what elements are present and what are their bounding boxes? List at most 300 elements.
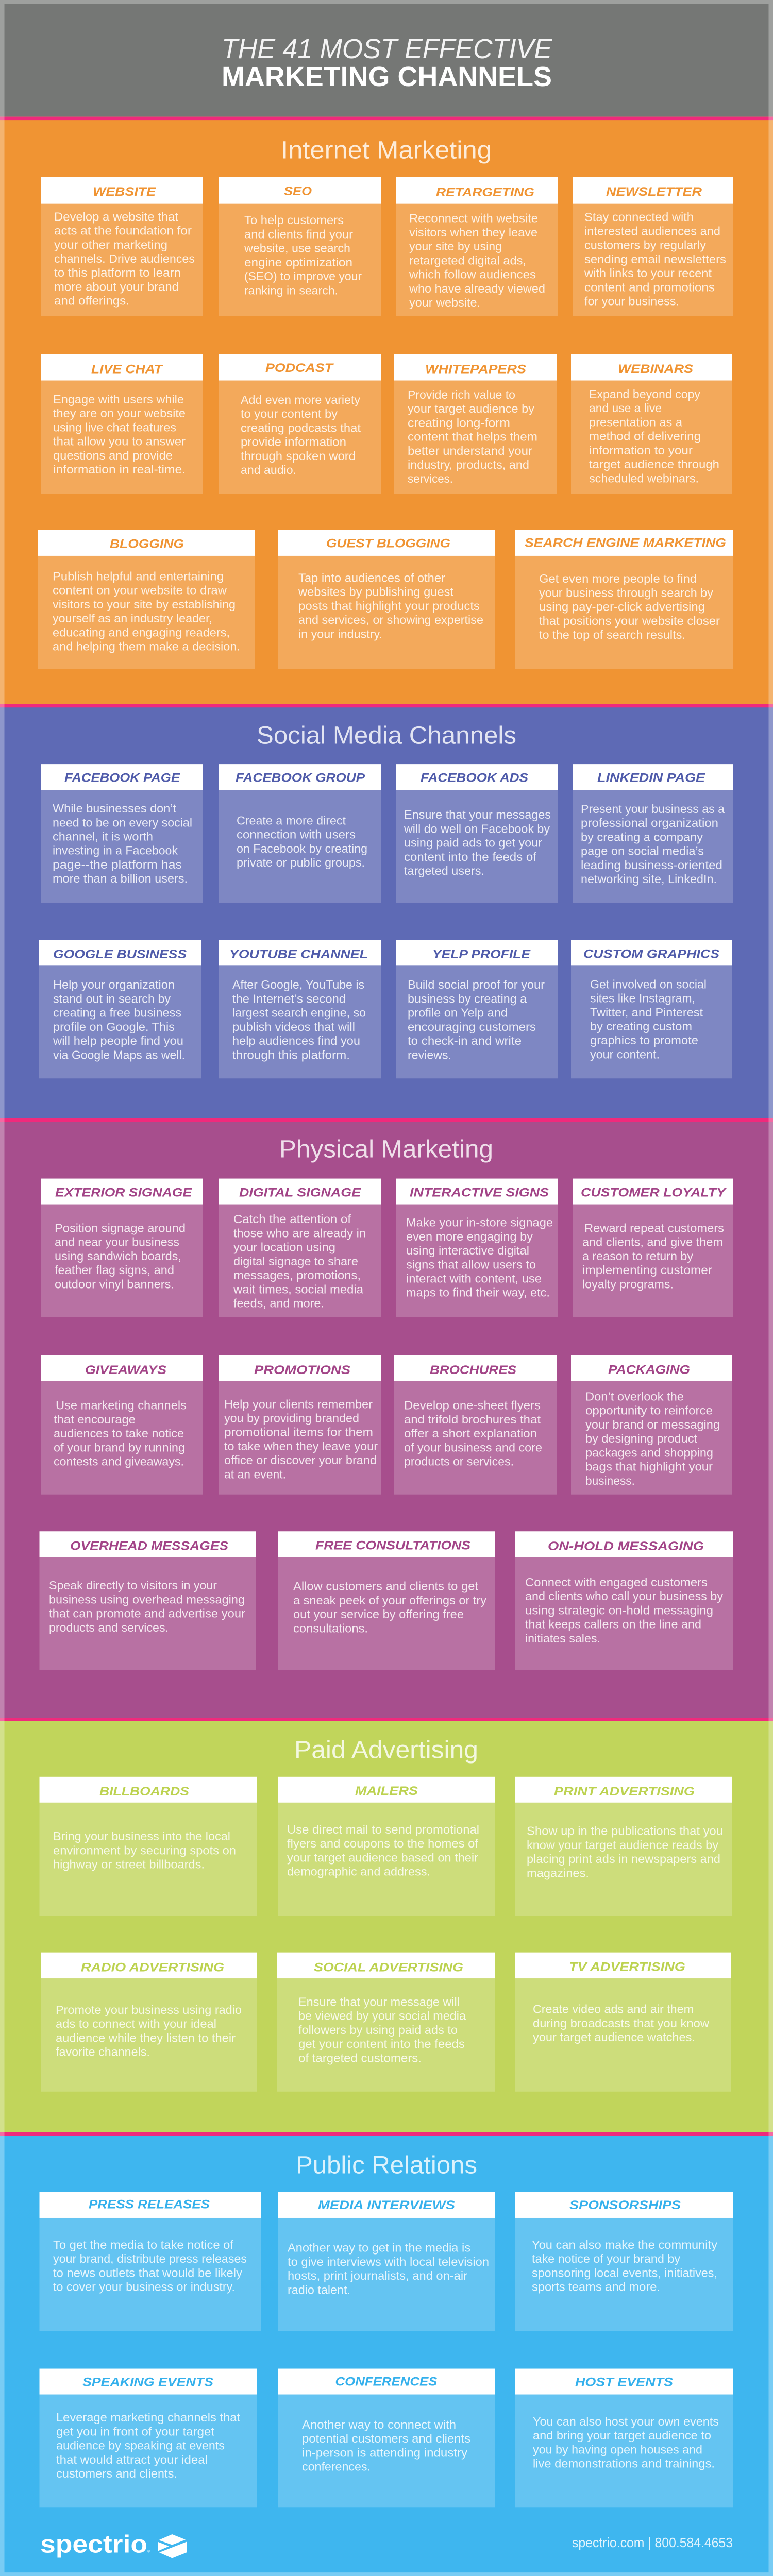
card: webinars: WEBINARS bbox=[618, 362, 694, 376]
card: podcast: to your content by bbox=[241, 408, 338, 421]
card: packaging: by designing product bbox=[585, 1433, 697, 1446]
card: newsletter: content and promotions bbox=[584, 281, 715, 294]
card: website: your other marketing bbox=[54, 239, 167, 251]
card: youtube channel: publish videos that will bbox=[232, 1021, 355, 1033]
card: guest blogging: websites by publishing guest bbox=[298, 586, 453, 599]
card: seo: website, use search bbox=[244, 242, 350, 255]
card: mailers: MAILERS bbox=[355, 1784, 418, 1798]
card: radio advertising: audience while they listen to their bbox=[56, 2032, 236, 2045]
card: blogging: content on your website to draw bbox=[53, 584, 227, 597]
card: customer loyalty: a reason to return by bbox=[582, 1250, 694, 1263]
card: speaking events: that would attract your ideal bbox=[56, 2453, 208, 2466]
card: search engine marketing: using pay-per-click advertising bbox=[539, 601, 705, 614]
card: speaking events: customers and clients. bbox=[56, 2468, 177, 2481]
card: conferences: conferences. bbox=[302, 2461, 371, 2473]
card: facebook page: FACEBOOK PAGE bbox=[64, 770, 181, 785]
card: podcast: creating podcasts that bbox=[241, 422, 361, 435]
card: promotions: Help your clients remember bbox=[224, 1398, 373, 1411]
card: print advertising: know your target audience reads by bbox=[527, 1839, 719, 1852]
heading: physical marketing: Physical Marketing bbox=[279, 1136, 493, 1163]
card: facebook ads: content into the feeds of bbox=[404, 851, 536, 863]
card: newsletter: interested audiences and bbox=[584, 225, 720, 238]
title bbox=[222, 34, 552, 92]
card: live chat: Engage with users while bbox=[53, 394, 184, 406]
heading: social media channels: Social Media Channels bbox=[257, 722, 516, 750]
card: exterior signage: using sandwich boards, bbox=[55, 1250, 181, 1263]
card: linkedin page bbox=[573, 764, 733, 903]
card: whitepapers bbox=[394, 354, 557, 494]
card: search engine marketing: that positions your website closer bbox=[539, 615, 720, 628]
heading: public relations: Public Relations bbox=[296, 2151, 477, 2179]
card: conferences: Another way to connect with bbox=[302, 2419, 456, 2431]
card: website: to this platform to learn bbox=[54, 267, 181, 280]
card: speaking events: audience by speaking at events bbox=[56, 2439, 225, 2452]
card: interactive signs: signs that allow users to bbox=[406, 1259, 536, 1272]
card: newsletter: customers by regularly bbox=[584, 239, 707, 252]
card: interactive signs: using interactive digital bbox=[406, 1245, 529, 1258]
card: media interviews: to give interviews with local television bbox=[288, 2256, 489, 2268]
card: customer loyalty bbox=[573, 1179, 733, 1317]
card: blogging: educating and engaging readers, bbox=[53, 626, 230, 639]
card: on-hold messaging: using strategic on-hold messaging bbox=[525, 1604, 713, 1617]
card: guest blogging bbox=[278, 530, 495, 669]
card: website: and offerings. bbox=[54, 295, 129, 308]
card: custom graphics: Get involved on social bbox=[590, 978, 707, 991]
card: google business: profile on Google. This bbox=[53, 1021, 175, 1033]
card: promotions: to take when they leave your bbox=[224, 1440, 378, 1453]
card: search engine marketing bbox=[515, 530, 733, 669]
card: podcast: PODCAST bbox=[265, 361, 334, 375]
card: mailers bbox=[278, 1777, 495, 1916]
card: host events: you by having open houses and bbox=[533, 2444, 702, 2456]
card: seo: (SEO) to improve your bbox=[244, 270, 362, 283]
card: yelp profile: encouraging customers bbox=[408, 1021, 536, 1033]
card: google business: creating a free business bbox=[53, 1007, 181, 1020]
card: billboards: highway or street billboards. bbox=[53, 1858, 205, 1871]
card: digital signage: feeds, and more. bbox=[233, 1297, 324, 1310]
card: retargeting: which follow audiences bbox=[409, 268, 536, 281]
card: exterior signage: and near your business bbox=[55, 1236, 179, 1249]
card: exterior signage: outdoor vinyl banners. bbox=[55, 1278, 174, 1291]
card: retargeting: your site by using bbox=[409, 241, 502, 253]
card: customer loyalty: implementing customer bbox=[582, 1264, 712, 1277]
card: overhead messages: business using overhead messaging bbox=[49, 1594, 245, 1606]
card: media interviews: MEDIA INTERVIEWS bbox=[318, 2198, 456, 2212]
card: yelp profile: business by creating a bbox=[408, 993, 527, 1006]
card: search engine marketing: your business through search by bbox=[539, 587, 714, 600]
icon: spectrio hexagon bbox=[158, 2534, 187, 2558]
card: interactive signs: interact with content, use bbox=[406, 1273, 542, 1285]
card: billboards: Bring your business into the local bbox=[53, 1831, 230, 1843]
card: google business bbox=[39, 940, 201, 1078]
card: tv advertising: your target audience watches. bbox=[533, 2031, 695, 2044]
card: retargeting: RETARGETING bbox=[436, 185, 534, 199]
card: giveaways: GIVEAWAYS bbox=[85, 1363, 167, 1377]
card: radio advertising: Promote your business using radio bbox=[56, 2004, 242, 2017]
card: customer loyalty: loyalty programs. bbox=[582, 1278, 674, 1291]
card: facebook group: Create a more direct bbox=[237, 815, 346, 827]
card: social advertising: be viewed by your social media bbox=[298, 2010, 466, 2023]
card: youtube channel: YOUTUBE CHANNEL bbox=[229, 947, 368, 961]
card: overhead messages: that can promote and advertise your bbox=[49, 1607, 245, 1620]
card: linkedin page: by creating a company bbox=[581, 831, 703, 844]
card: retargeting: visitors when they leave bbox=[409, 227, 537, 240]
card: linkedin page: leading business-oriented bbox=[581, 859, 722, 872]
card: facebook ads: FACEBOOK ADS bbox=[421, 770, 529, 785]
card: live chat bbox=[41, 354, 203, 494]
card: brochures: of your business and core bbox=[404, 1442, 542, 1454]
heading: internet marketing: Internet Marketing bbox=[281, 137, 492, 164]
card: interactive signs: Make your in-store signage bbox=[406, 1216, 553, 1229]
card: custom graphics: CUSTOM GRAPHICS bbox=[583, 947, 720, 961]
card: mailers: Use direct mail to send promotional bbox=[287, 1823, 479, 1836]
title: THE 41 MOST EFFECTIVE bbox=[222, 34, 552, 64]
card: sponsorships: You can also make the community bbox=[532, 2239, 718, 2251]
card: linkedin page: Present your business as a bbox=[581, 803, 725, 816]
card: custom graphics: sites like Instagram, bbox=[590, 992, 695, 1005]
card: digital signage: Catch the attention of bbox=[233, 1213, 351, 1226]
card: yelp profile: reviews. bbox=[408, 1049, 451, 1062]
card: overhead messages: Speak directly to visitors in your bbox=[49, 1580, 217, 1592]
card: print advertising: magazines. bbox=[527, 1867, 589, 1880]
card: host events: live demonstrations and trainings. bbox=[533, 2458, 715, 2470]
card: webinars bbox=[571, 354, 732, 494]
card: packaging: opportunity to reinforce bbox=[585, 1404, 713, 1417]
card: tv advertising bbox=[515, 1953, 731, 2092]
card: live chat: questions and provide bbox=[53, 450, 173, 462]
card: podcast: through spoken word bbox=[241, 450, 356, 463]
card: promotions: you by providing branded bbox=[224, 1412, 359, 1425]
card: live chat: using live chat features bbox=[53, 421, 176, 434]
card: webinars: and use a live bbox=[589, 402, 662, 415]
card: facebook ads bbox=[396, 764, 558, 903]
card: youtube channel bbox=[219, 940, 381, 1078]
card: facebook page: more than a billion users. bbox=[53, 873, 188, 886]
card: whitepapers: creating long-form bbox=[408, 417, 510, 430]
card: facebook page: investing in a Facebook bbox=[53, 844, 178, 857]
card: interactive signs: INTERACTIVE SIGNS bbox=[410, 1185, 549, 1199]
panel: paid advertising bbox=[0, 1718, 773, 2132]
card: website: channels. Drive audiences bbox=[54, 253, 195, 266]
card: packaging: bags that highlight your bbox=[585, 1461, 713, 1473]
card: youtube channel: through this platform. bbox=[232, 1049, 350, 1062]
card: sponsorships: sponsoring local events, initiatives, bbox=[532, 2267, 717, 2280]
card: blogging bbox=[38, 530, 255, 669]
card: free consultations: FREE CONSULTATIONS bbox=[315, 1538, 471, 1552]
card: facebook page: page--the platform has bbox=[53, 859, 182, 872]
card: digital signage: wait times, social media bbox=[233, 1283, 363, 1296]
card: live chat: that allow you to answer bbox=[53, 435, 186, 448]
card: free consultations bbox=[278, 1531, 495, 1670]
logo: spectrio wordmark: spectrio bbox=[40, 2531, 147, 2558]
card: blogging: BLOGGING bbox=[110, 536, 184, 551]
card: social advertising: SOCIAL ADVERTISING bbox=[314, 1960, 463, 1974]
card: conferences: CONFERENCES bbox=[335, 2374, 438, 2388]
card: exterior signage: feather flag signs, and bbox=[55, 1264, 174, 1277]
card: exterior signage: Position signage around bbox=[55, 1222, 186, 1235]
card: promotions bbox=[219, 1355, 381, 1495]
card: interactive signs bbox=[396, 1179, 558, 1317]
card: guest blogging: Tap into audiences of other bbox=[298, 572, 445, 585]
panel: public relations bbox=[0, 2132, 773, 2576]
card: giveaways bbox=[41, 1355, 203, 1495]
card: retargeting: your website. bbox=[409, 297, 480, 310]
card: mailers: your target audience based on their bbox=[287, 1852, 478, 1865]
card: live chat: they are on your website bbox=[53, 408, 186, 420]
card: customer loyalty: Reward repeat customers bbox=[584, 1222, 724, 1235]
card: brochures: offer a short explanation bbox=[404, 1428, 537, 1440]
card: interactive signs: even more engaging by bbox=[406, 1230, 533, 1243]
card: custom graphics: graphics to promote bbox=[590, 1035, 698, 1047]
card: whitepapers: better understand your bbox=[408, 445, 532, 457]
card: press releases: to news outlets that would be likely bbox=[53, 2267, 243, 2280]
card: seo: ranking in search. bbox=[244, 284, 338, 297]
card: facebook group: private or public groups. bbox=[237, 857, 365, 870]
card: packaging: Don’t overlook the bbox=[585, 1391, 684, 1403]
card: press releases: PRESS RELEASES bbox=[89, 2197, 210, 2211]
card: custom graphics: Twitter, and Pinterest bbox=[590, 1006, 703, 1019]
card: whitepapers: industry, products, and bbox=[408, 459, 529, 472]
card: packaging bbox=[571, 1355, 732, 1495]
card: sponsorships: sports teams and more. bbox=[532, 2281, 660, 2294]
card: retargeting bbox=[396, 177, 558, 316]
card: billboards bbox=[39, 1777, 257, 1916]
card: youtube channel: largest search engine, so bbox=[232, 1007, 366, 1020]
card: customer loyalty: CUSTOMER LOYALTY bbox=[581, 1185, 727, 1199]
card: brochures bbox=[394, 1355, 557, 1495]
card: facebook page: channel, it is worth bbox=[53, 831, 153, 843]
header banner bbox=[0, 0, 773, 117]
card: newsletter: for your business. bbox=[584, 295, 679, 308]
card: webinars: target audience through bbox=[589, 459, 719, 471]
card: whitepapers: services. bbox=[408, 473, 453, 486]
card: speaking events: get you in front of your target bbox=[56, 2426, 214, 2438]
card: blogging: visitors to your site by establishing bbox=[53, 598, 236, 611]
card: newsletter: with links to your recent bbox=[584, 267, 712, 280]
card: radio advertising: favorite channels. bbox=[56, 2046, 150, 2059]
footer contact: spectrio.com | 800.584.4653 bbox=[572, 2535, 733, 2550]
card: radio advertising bbox=[41, 1953, 257, 2092]
card: youtube channel: help audiences find you bbox=[232, 1035, 360, 1048]
card: mailers: flyers and coupons to the homes of bbox=[287, 1838, 478, 1851]
card: facebook group: connection with users bbox=[237, 828, 356, 841]
card: radio advertising: ads to connect with your ideal bbox=[56, 2018, 216, 2031]
card: digital signage: DIGITAL SIGNAGE bbox=[239, 1185, 362, 1199]
card: seo: To help customers bbox=[244, 214, 344, 227]
card: website: WEBSITE bbox=[93, 184, 157, 199]
card: google business: Help your organization bbox=[53, 979, 175, 992]
card: retargeting: Reconnect with website bbox=[409, 212, 538, 225]
card: host events: HOST EVENTS bbox=[575, 2375, 674, 2389]
card: overhead messages bbox=[39, 1531, 256, 1670]
card: billboards: environment by securing spots on bbox=[53, 1844, 236, 1857]
card: yelp profile: to check-in and write bbox=[408, 1035, 522, 1048]
panel: physical marketing bbox=[0, 1118, 773, 1718]
card: digital signage: those who are already in bbox=[233, 1227, 366, 1240]
card: podcast: Add even more variety bbox=[241, 394, 361, 406]
card: giveaways: that encourage bbox=[54, 1414, 136, 1426]
card: giveaways: contests and giveaways. bbox=[54, 1455, 184, 1468]
card: custom graphics bbox=[571, 940, 732, 1078]
card: print advertising: PRINT ADVERTISING bbox=[554, 1784, 695, 1799]
card: packaging: business. bbox=[585, 1475, 635, 1487]
card: social advertising bbox=[277, 1953, 495, 2092]
card: webinars: information to your bbox=[589, 445, 693, 457]
card: host events: You can also host your own events bbox=[533, 2415, 719, 2428]
card: digital signage: messages, promotions, bbox=[233, 1269, 361, 1282]
card: seo: and clients find your bbox=[244, 228, 353, 241]
card: radio advertising: RADIO ADVERTISING bbox=[81, 1960, 224, 1974]
card: media interviews: Another way to get in the media is bbox=[288, 2242, 470, 2255]
card: free consultations: consultations. bbox=[293, 1622, 368, 1635]
card: webinars: Expand beyond copy bbox=[589, 388, 701, 401]
card: webinars: method of delivering bbox=[589, 430, 701, 443]
card: live chat: LIVE CHAT bbox=[91, 362, 163, 376]
card: promotions: promotional items for them bbox=[224, 1426, 373, 1439]
card: tv advertising: Create video ads and air them bbox=[533, 2003, 694, 2016]
card: promotions: office or discover your brand bbox=[224, 1454, 377, 1467]
card: website: acts at the foundation for bbox=[54, 225, 192, 238]
card: tv advertising: during broadcasts that you know bbox=[533, 2018, 709, 2030]
card: packaging: PACKAGING bbox=[608, 1362, 690, 1377]
card: facebook ads: using paid ads to get your bbox=[404, 837, 542, 850]
card: podcast: provide information bbox=[241, 436, 346, 449]
card: youtube channel: the Internet’s second bbox=[232, 993, 346, 1006]
card: blogging: and helping them make a decision. bbox=[53, 640, 240, 653]
card: newsletter: Stay connected with bbox=[584, 211, 694, 224]
card: google business: via Google Maps as well. bbox=[53, 1049, 185, 1062]
card: on-hold messaging: ON-HOLD MESSAGING bbox=[548, 1539, 704, 1553]
card: facebook group bbox=[219, 764, 381, 903]
card: website: Develop a website that bbox=[54, 211, 178, 224]
card: facebook page: While businesses don’t bbox=[53, 803, 176, 816]
card: brochures: Develop one-sheet flyers bbox=[404, 1399, 541, 1412]
card: social advertising: followers by using paid ads to bbox=[298, 2024, 458, 2037]
card: on-hold messaging bbox=[515, 1531, 733, 1670]
card: yelp profile bbox=[396, 940, 558, 1078]
card: guest blogging: and services, or showing expertise bbox=[298, 614, 483, 627]
card: podcast bbox=[219, 354, 381, 494]
card: billboards: BILLBOARDS bbox=[99, 1784, 190, 1799]
card: blogging: yourself as an industry leader, bbox=[53, 613, 212, 625]
card: google business: stand out in search by bbox=[53, 993, 171, 1006]
card: conferences bbox=[278, 2369, 495, 2507]
card: sponsorships bbox=[515, 2192, 733, 2331]
card: overhead messages: OVERHEAD MESSAGES bbox=[70, 1538, 229, 1553]
card: youtube channel: After Google, YouTube is bbox=[232, 979, 364, 992]
card: giveaways: audiences to take notice bbox=[54, 1428, 184, 1440]
card: whitepapers: Provide rich value to bbox=[408, 388, 515, 401]
card: social advertising: Ensure that your message will bbox=[298, 1996, 460, 2009]
card: digital signage bbox=[219, 1179, 381, 1317]
card: facebook group: FACEBOOK GROUP bbox=[236, 770, 365, 785]
card: yelp profile: profile on Yelp and bbox=[408, 1007, 508, 1020]
card: facebook ads: will do well on Facebook by bbox=[404, 823, 550, 836]
card: brochures: and trifold brochures that bbox=[404, 1414, 541, 1426]
card: tv advertising: TV ADVERTISING bbox=[569, 1959, 685, 1974]
card: yelp profile: YELP PROFILE bbox=[432, 947, 531, 961]
card: custom graphics: by creating custom bbox=[590, 1021, 692, 1033]
card: linkedin page: professional organization bbox=[581, 817, 718, 830]
card: whitepapers: WHITEPAPERS bbox=[425, 362, 527, 376]
card: on-hold messaging: that keeps callers on the line and bbox=[525, 1618, 701, 1631]
title: MARKETING CHANNELS bbox=[222, 62, 552, 92]
card: promotions: PROMOTIONS bbox=[254, 1363, 351, 1377]
card: search engine marketing: SEARCH ENGINE MARKETING bbox=[525, 535, 726, 550]
card: social advertising: of targeted customers. bbox=[298, 2052, 422, 2065]
card: giveaways: Use marketing channels bbox=[56, 1399, 187, 1412]
card: seo: engine optimization bbox=[244, 257, 352, 269]
card: google business: will help people find you bbox=[53, 1035, 183, 1048]
card: webinars: presentation as a bbox=[589, 416, 682, 429]
card: brochures: products or services. bbox=[404, 1455, 514, 1468]
card: interactive signs: maps to find their way, etc. bbox=[406, 1286, 550, 1299]
card: free consultations: out your service by offering free bbox=[293, 1608, 464, 1621]
card: packaging: your brand or messaging bbox=[585, 1419, 720, 1431]
card: free consultations: Allow customers and clients to get bbox=[293, 1580, 478, 1593]
card: linkedin page: page on social media’s bbox=[581, 845, 704, 858]
card: media interviews bbox=[278, 2192, 495, 2331]
card: brochures: BROCHURES bbox=[430, 1363, 517, 1377]
card: host events: and bring your target audience to bbox=[533, 2430, 711, 2443]
card: exterior signage: EXTERIOR SIGNAGE bbox=[55, 1185, 193, 1199]
card: podcast: and audio. bbox=[241, 464, 296, 477]
card: search engine marketing: Get even more people to find bbox=[539, 573, 697, 586]
card: website bbox=[41, 177, 203, 316]
card: print advertising bbox=[515, 1777, 732, 1916]
card: promotions: at an event. bbox=[224, 1468, 286, 1481]
card: live chat: information in real-time. bbox=[53, 464, 186, 477]
card: google business: GOOGLE BUSINESS bbox=[53, 947, 187, 961]
panel: social media channels bbox=[0, 704, 773, 1118]
card: print advertising: Show up in the publications that you bbox=[527, 1825, 723, 1838]
card: facebook ads: targeted users. bbox=[404, 865, 484, 878]
card: sponsorships: SPONSORSHIPS bbox=[569, 2198, 681, 2212]
card: retargeting: who have already viewed bbox=[409, 283, 545, 295]
card: speaking events bbox=[39, 2369, 257, 2507]
card: facebook group: on Facebook by creating bbox=[237, 842, 367, 855]
card: on-hold messaging: Connect with engaged customers bbox=[525, 1576, 708, 1589]
card: facebook ads: Ensure that your messages bbox=[404, 809, 551, 822]
heading: paid advertising: Paid Advertising bbox=[294, 1736, 478, 1764]
card: custom graphics: your content. bbox=[590, 1048, 660, 1061]
card: linkedin page: LINKEDIN PAGE bbox=[597, 770, 706, 785]
card: packaging: packages and shopping bbox=[585, 1447, 713, 1460]
card: conferences: in-person is attending industry bbox=[302, 2447, 468, 2460]
panel: internet marketing bbox=[0, 117, 773, 704]
logo: spectrio wordmark: ® bbox=[147, 2550, 150, 2553]
card: digital signage: digital signage to share bbox=[233, 1255, 358, 1268]
card: digital signage: your location using bbox=[233, 1241, 335, 1254]
card: website: more about your brand bbox=[54, 281, 179, 294]
card: sponsorships: take notice of your brand by bbox=[532, 2253, 681, 2266]
card: yelp profile: Build social proof for your bbox=[408, 979, 545, 992]
card: guest blogging: in your industry. bbox=[298, 628, 382, 641]
card: guest blogging: GUEST BLOGGING bbox=[326, 536, 450, 550]
card: guest blogging: posts that highlight your products bbox=[298, 600, 480, 613]
card: media interviews: radio talent. bbox=[288, 2284, 350, 2297]
card: seo: SEO bbox=[284, 184, 312, 198]
card: speaking events: SPEAKING EVENTS bbox=[82, 2375, 214, 2389]
card: overhead messages: products and services. bbox=[49, 1621, 169, 1634]
card: press releases bbox=[39, 2192, 261, 2331]
card: search engine marketing: to the top of search results. bbox=[539, 629, 685, 642]
card: blogging: Publish helpful and entertaining bbox=[53, 570, 224, 583]
card: on-hold messaging: initiates sales. bbox=[525, 1632, 600, 1645]
card: conferences: potential customers and clients bbox=[302, 2433, 470, 2446]
card: retargeting: retargeted digital ads, bbox=[409, 255, 526, 267]
card: whitepapers: content that helps them bbox=[408, 431, 537, 444]
